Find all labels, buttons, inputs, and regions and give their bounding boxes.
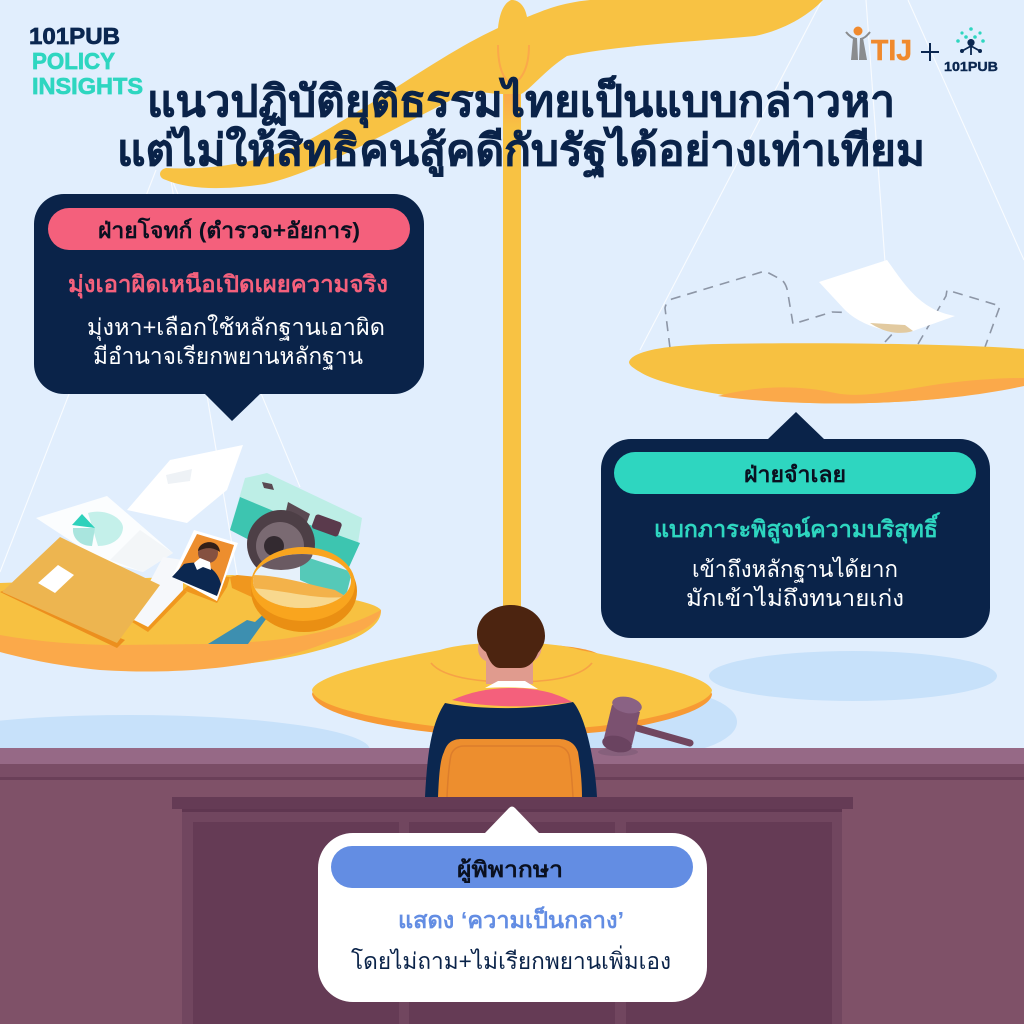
defendant header: [614, 452, 976, 494]
camera: [230, 473, 362, 545]
title: [117, 75, 925, 178]
chair: [438, 739, 582, 797]
dashed outline of missing evidence: [665, 271, 1000, 348]
right scale pan with paper: [629, 260, 1024, 403]
pan: [629, 343, 1024, 403]
logo: 101PUB Policy Insights: INSIGHTS: [32, 73, 143, 99]
judge from behind: [425, 605, 597, 797]
white sheet under folder: [134, 557, 183, 627]
back paper: [127, 445, 243, 523]
neck and ears: [478, 640, 542, 684]
plus sign: [921, 43, 939, 61]
judge emphasis: แสดง ‘ความเป็นกลาง’: [398, 905, 624, 933]
scale strings: [0, 0, 1024, 640]
white collar: [485, 681, 538, 689]
logo: 101PUB Policy Insights: 101PUB: [29, 23, 120, 49]
title: แต่ไม่ให้สิทธิคนสู้คดีกับรัฐได้อย่างเท่าเทียม: [117, 125, 925, 178]
panel: prosecution: ฝ่ายโจทก์ (ตำรวจ+อัยการ): [98, 217, 360, 243]
logo: TIJ + 101PUB: TIJ: [871, 35, 912, 67]
center scale pan: [312, 642, 712, 736]
paper with pie chart: [36, 496, 173, 572]
portrait photo: [172, 530, 238, 601]
logo: 101PUB Policy Insights: [29, 23, 143, 99]
navy robe: [425, 702, 597, 797]
gavel: [598, 694, 690, 756]
panel: defendant: มักเข้าไม่ถึงทนายเก่ง: [686, 585, 904, 611]
pan: [0, 575, 381, 667]
shadow ellipses behind the scale: [0, 651, 997, 785]
desk top slab: [172, 797, 853, 809]
judge header: [331, 846, 693, 888]
panel: judge: ผู้พิพากษา: [457, 857, 563, 884]
prosecution body: มุ่งหา+เลือกใช้หลักฐานเอาผิด: [87, 314, 385, 341]
defendant body: เข้าถึงหลักฐานได้ยาก: [692, 556, 898, 583]
desk front panels: [182, 809, 842, 1024]
paper: [819, 260, 955, 332]
magnifying glass: [251, 550, 357, 632]
magnifying glass handle: [208, 611, 269, 644]
shadows on the pan: [132, 575, 333, 632]
logo: TIJ + 101PUB: [846, 26, 998, 74]
desk: [0, 748, 1024, 1024]
scale beam and pole: [160, 0, 823, 620]
title: แนวปฏิบัติยุติธรรมไทยเป็นแบบกล่าวหา: [147, 75, 895, 129]
panel: defendant: [601, 412, 990, 638]
panel: prosecution: [34, 194, 424, 421]
logo: 101PUB Policy Insights: POLICY: [32, 48, 115, 74]
defendant emphasis: แบกภาระพิสูจน์ความบริสุทธิ์: [654, 512, 940, 544]
left scale pan with evidence: [0, 445, 381, 672]
TIJ figure icon: [846, 26, 870, 60]
folder: [0, 590, 125, 648]
prosecution header: [48, 208, 410, 250]
prosecution emphasis: มุ่งเอาผิดเหนือเปิดเผยความจริง: [68, 271, 388, 299]
panel: defendant: ฝ่ายจำเลย: [744, 462, 846, 487]
hair: [477, 605, 545, 668]
pink sash: [452, 688, 572, 706]
panel: judge: [318, 806, 707, 1002]
judge body: โดยไม่ถาม+ไม่เรียกพยานเพิ่มเอง: [351, 945, 671, 974]
101PUB network icon: [956, 27, 985, 55]
panel: prosecution: มีอำนาจเรียกพยานหลักฐาน: [93, 343, 363, 370]
logo: TIJ + 101PUB: 101PUB: [944, 59, 998, 74]
